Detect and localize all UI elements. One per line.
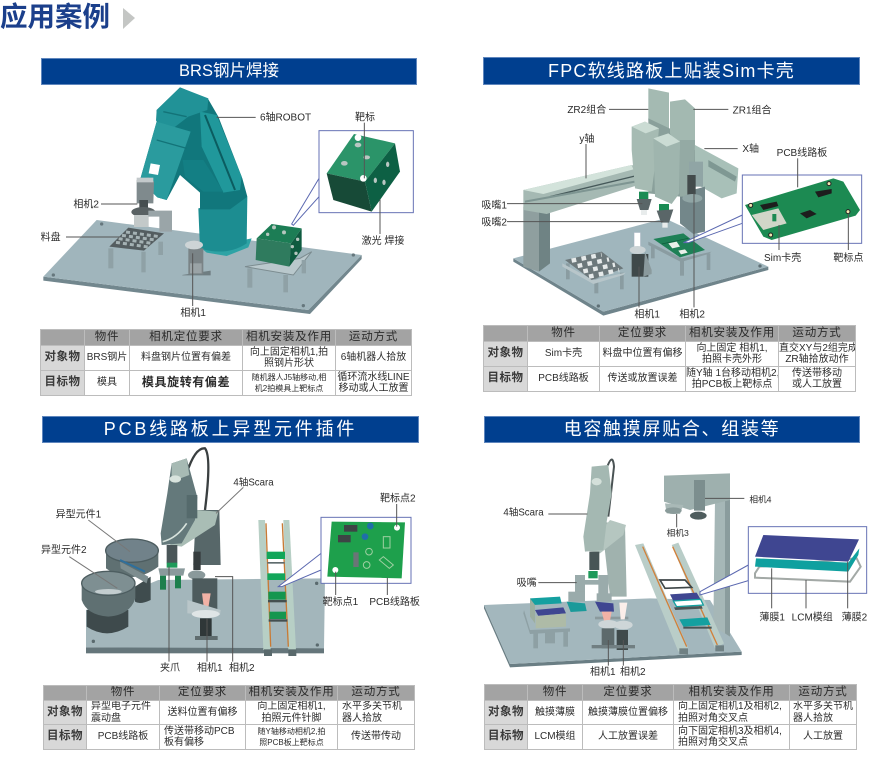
film stacks	[523, 597, 570, 648]
heading: FPC	[483, 57, 860, 85]
table: PCB: 板有偏移	[164, 737, 204, 748]
label: gripper: 夹爪	[160, 661, 180, 674]
label: part 2	[41, 543, 117, 588]
cable	[187, 448, 208, 510]
table: FPC: 向上固定 相机1,	[696, 342, 768, 354]
label: target 2	[380, 492, 416, 527]
table: PCB: 器人拾放	[342, 712, 382, 724]
table: FPC	[483, 325, 856, 392]
label: LCM module: LCM模组	[792, 611, 833, 624]
table: touch screen: 水平多关节机	[793, 701, 853, 712]
illustration: touch screen assembly station	[484, 458, 868, 677]
table: PCB: 异型电子元件	[91, 701, 151, 712]
label: nozzle: 吸嘴	[517, 577, 537, 589]
label: target 2: 靶标点2	[380, 492, 416, 505]
pcb boards	[653, 233, 705, 257]
table: FPC: 传送或放置误差	[608, 373, 678, 384]
base plate	[484, 598, 742, 667]
label: LCM module	[792, 580, 833, 624]
table: BRS: 循环流水线LINE	[337, 372, 410, 382]
heading: PCB	[42, 416, 419, 443]
label: camera 2	[215, 577, 255, 674]
table: PCB	[43, 685, 415, 750]
feeder bowl 2	[82, 571, 135, 633]
label: film 1	[759, 568, 785, 624]
illustration: gantry station	[481, 88, 863, 320]
inset: PCB	[278, 517, 411, 587]
table: FPC: 定位要求	[618, 327, 667, 339]
inspection cameras	[592, 603, 635, 650]
label: camera 1	[634, 267, 660, 321]
label: camera 4: 相机4	[749, 493, 772, 504]
label: target	[355, 111, 375, 178]
label: PCB board: PCB线路板	[369, 595, 420, 608]
table: BRS: 随机器人J5轴移动,相	[252, 373, 326, 382]
table: PCB: PCB线路板	[98, 731, 148, 742]
table: BRS: BRS钢片	[87, 352, 127, 363]
table: BRS: 相机安装及作用	[246, 331, 332, 343]
backing mass	[648, 118, 695, 197]
conveyor	[635, 543, 724, 654]
ZR1	[670, 99, 695, 197]
label: camera 3: 相机3	[667, 527, 689, 538]
right column	[680, 187, 705, 234]
label: tray: 料盘	[41, 231, 61, 244]
table: PCB: 对象物	[47, 706, 83, 718]
label: camera 2	[679, 193, 705, 321]
left column	[523, 207, 550, 272]
table: BRS: 对象物	[44, 351, 80, 363]
label: target point: 靶标点	[833, 251, 863, 264]
table: BRS: 6轴机器人拾放	[341, 352, 406, 363]
label: nozzle 2: 吸嘴2	[481, 217, 507, 229]
label: camera 2	[620, 640, 646, 678]
panel: PCB insertion	[41, 416, 420, 750]
table: touch screen: 器人拾放	[793, 712, 833, 724]
suction head	[568, 575, 612, 602]
6-axis robot	[140, 87, 252, 256]
table: touch screen: 触摸薄膜位置偏移	[588, 707, 668, 718]
base plate	[513, 218, 768, 316]
label: target point	[833, 213, 863, 264]
panel: touch screen	[484, 416, 868, 750]
base plate	[43, 220, 362, 314]
label: laser welding	[362, 199, 404, 247]
camera 2	[682, 162, 703, 203]
label: nozzle	[517, 577, 577, 589]
label: y axis: y轴	[579, 132, 594, 145]
label: ZR1	[693, 103, 772, 116]
label: target 1	[323, 572, 359, 608]
block stand	[245, 252, 312, 292]
table: BRS: 运动方式	[349, 331, 398, 343]
conveyor	[258, 520, 296, 656]
ZR2	[648, 88, 669, 132]
feeder bowl 1	[106, 539, 158, 603]
tray stand	[108, 242, 163, 272]
label: part 1: 异型元件1	[56, 508, 102, 521]
material tray	[562, 252, 626, 293]
table: PCB: 目标物	[47, 730, 83, 742]
table: touch screen: 人工放置	[803, 731, 843, 742]
scara arm	[161, 458, 197, 545]
table: touch screen: LCM模组	[534, 731, 576, 742]
label: film 1: 薄膜1	[759, 611, 785, 624]
label: y axis	[579, 132, 594, 178]
table: touch screen: 触摸薄膜	[535, 707, 575, 718]
scara arm	[583, 465, 612, 578]
table: FPC: 物件	[551, 327, 576, 339]
label: nozzle 1: 吸嘴1	[481, 200, 507, 212]
label: camera 1	[590, 640, 616, 678]
label: camera 2	[73, 198, 137, 211]
table: PCB: 送料位置有偏移	[168, 707, 238, 718]
material tray	[109, 228, 164, 251]
table: touch screen: 目标物	[488, 730, 524, 742]
table: FPC: 拍PCB板上靶标点	[692, 379, 772, 390]
label: gripper	[160, 567, 180, 674]
table: FPC: 目标物	[488, 372, 524, 384]
table: PCB: 传送带移动PCB	[164, 726, 235, 736]
table: FPC: ZR轴拾放动作	[785, 354, 849, 365]
base plate	[86, 578, 325, 653]
label: 4-axis Scara	[503, 507, 587, 519]
label: ZR2: ZR2组合	[567, 103, 606, 116]
table: PCB: 运动方式	[351, 686, 401, 698]
mold block	[256, 224, 302, 267]
table: BRS: 模具旋转有偏差	[142, 375, 230, 389]
label: camera 1	[197, 618, 223, 674]
label: part 1	[56, 508, 130, 552]
table: FPC: 拍照卡壳外形	[702, 354, 762, 365]
table: touch screen: 向下固定相机3及相机4,	[678, 726, 782, 736]
label: camera 2: 相机2	[229, 661, 255, 674]
table: touch screen: 向上固定相机1及相机2,	[678, 701, 782, 712]
label: tray	[41, 231, 120, 244]
cable	[607, 460, 614, 517]
label: camera 2: 相机2	[73, 198, 99, 211]
heading: BRS	[41, 58, 417, 85]
scara column	[585, 520, 627, 597]
table: FPC: Sim卡壳	[545, 348, 582, 359]
label: target 1: 靶标点1	[323, 595, 359, 608]
scara column	[170, 510, 221, 565]
table: PCB: 定位要求	[178, 686, 227, 698]
table: BRS: 向上固定相机1,拍	[250, 346, 328, 358]
table: BRS: 料盘钢片位置有偏差	[141, 352, 231, 363]
label: camera 1	[180, 253, 206, 319]
inset: PCB	[683, 175, 862, 243]
label: Sim shell: Sim卡壳	[764, 251, 801, 264]
label: part 2: 异型元件2	[41, 543, 87, 556]
heading: PCB: PCB线路板上异型元件插件	[104, 419, 357, 439]
table: PCB: 水平多关节机	[342, 701, 402, 712]
label: camera 4	[705, 493, 772, 504]
table: PCB: 随Y轴移动相机2,拍	[257, 727, 326, 736]
light beam	[202, 593, 211, 614]
table: FPC: PCB线路板	[538, 373, 589, 384]
Z motor 1	[632, 122, 659, 215]
camera 2	[131, 177, 172, 232]
heading: BRS: BRS钢片焊接	[179, 62, 279, 80]
heading: touch screen	[484, 416, 860, 443]
table: BRS	[40, 329, 412, 396]
frame column	[713, 498, 730, 637]
label: PCB board	[369, 578, 420, 608]
label: target: 靶标	[355, 111, 375, 124]
label: 4-axis Scara: 4轴Scara	[503, 507, 544, 519]
inset: target block	[292, 131, 413, 225]
label: camera 3	[667, 514, 689, 538]
table: touch screen: 相机安装及作用	[688, 686, 775, 698]
label: Sim shell	[764, 225, 801, 264]
camera 1	[187, 600, 221, 640]
panel: FPC Sim	[481, 57, 863, 392]
label: 6-axis ROBOT: 6轴ROBOT	[260, 111, 311, 124]
label: ZR1: ZR1组合	[733, 103, 772, 116]
table: BRS: 目标物	[44, 376, 80, 388]
label: PCB board: PCB线路板	[777, 146, 827, 159]
table: FPC: 运动方式	[792, 327, 842, 339]
label: camera 1: 相机1	[197, 661, 223, 674]
table: FPC: 对象物	[488, 347, 524, 359]
table: BRS: 相机定位要求	[149, 331, 223, 343]
table: PCB: 拍照元件针脚	[262, 712, 322, 724]
label: 4-axis Scara: 4轴Scara	[233, 477, 274, 489]
table: touch screen: 人工放置误差	[598, 731, 658, 742]
pcb stand	[648, 242, 712, 276]
table: touch screen: 定位要求	[603, 686, 653, 698]
gripper	[158, 545, 185, 590]
label: ZR2	[567, 103, 648, 116]
table: BRS: 模具	[97, 377, 117, 388]
table: FPC: 传送带移动	[792, 368, 842, 378]
label: X axis	[704, 142, 759, 155]
label: X axis: X轴	[742, 142, 759, 155]
table: BRS: 移动或人工放置	[338, 383, 408, 394]
label: film 2	[842, 562, 868, 624]
label: camera 1: 相机1	[180, 306, 206, 319]
table: touch screen: 拍照对角交叉点	[678, 737, 748, 748]
table: touch screen	[484, 684, 857, 750]
label: laser welding: 激光 焊接	[362, 234, 404, 247]
label: film 2: 薄膜2	[842, 611, 868, 624]
title: 应用案例	[0, 1, 110, 32]
camera 1	[182, 241, 211, 275]
Z motor 2	[653, 133, 680, 228]
heading: FPC: FPC软线路板上贴装Sim卡壳	[548, 61, 795, 81]
y axis beam	[523, 165, 638, 214]
table: PCB: 传送带传动	[351, 731, 401, 742]
camera 3 and 4 mount	[664, 473, 730, 520]
table: FPC: 或人工放置	[792, 379, 842, 390]
table: FPC: 随Y轴 1台移动相机2,	[686, 368, 778, 378]
table: touch screen: 拍照对角交叉点	[678, 712, 748, 724]
label: PCB board	[777, 146, 827, 187]
table: BRS: 机2拍模具上靶标点	[255, 384, 323, 393]
camera 1	[630, 233, 652, 277]
x axis beam	[695, 145, 738, 198]
table: BRS: 照钢片形状	[264, 358, 314, 369]
table: PCB: 震动盘	[91, 712, 121, 724]
camera 2	[188, 552, 217, 609]
table: PCB: 物件	[111, 686, 135, 698]
label: 6-axis ROBOT	[217, 111, 311, 124]
heading: touch screen: 电容触摸屏贴合、组装等	[564, 419, 780, 439]
table: PCB: 照PCB板上靶标点	[259, 738, 324, 747]
table: PCB: 向上固定相机1,	[257, 701, 326, 712]
table: PCB: 相机安装及作用	[248, 686, 335, 698]
table: touch screen: 对象物	[488, 706, 524, 718]
panel: BRS welding	[40, 58, 417, 396]
inset: film stack	[700, 527, 867, 595]
held films	[567, 602, 614, 612]
table: touch screen: 物件	[543, 686, 567, 698]
illustration: scara insertion station	[41, 447, 420, 674]
table: touch screen: 运动方式	[798, 686, 848, 698]
table: FPC: 相机安装及作用	[689, 327, 775, 339]
illustration: robot welding station	[41, 87, 414, 319]
table: BRS: 物件	[95, 331, 119, 343]
icon: title arrow	[123, 8, 135, 29]
label: 4-axis Scara	[216, 477, 274, 513]
table: FPC: 料盘中位置有偏移	[602, 348, 682, 359]
